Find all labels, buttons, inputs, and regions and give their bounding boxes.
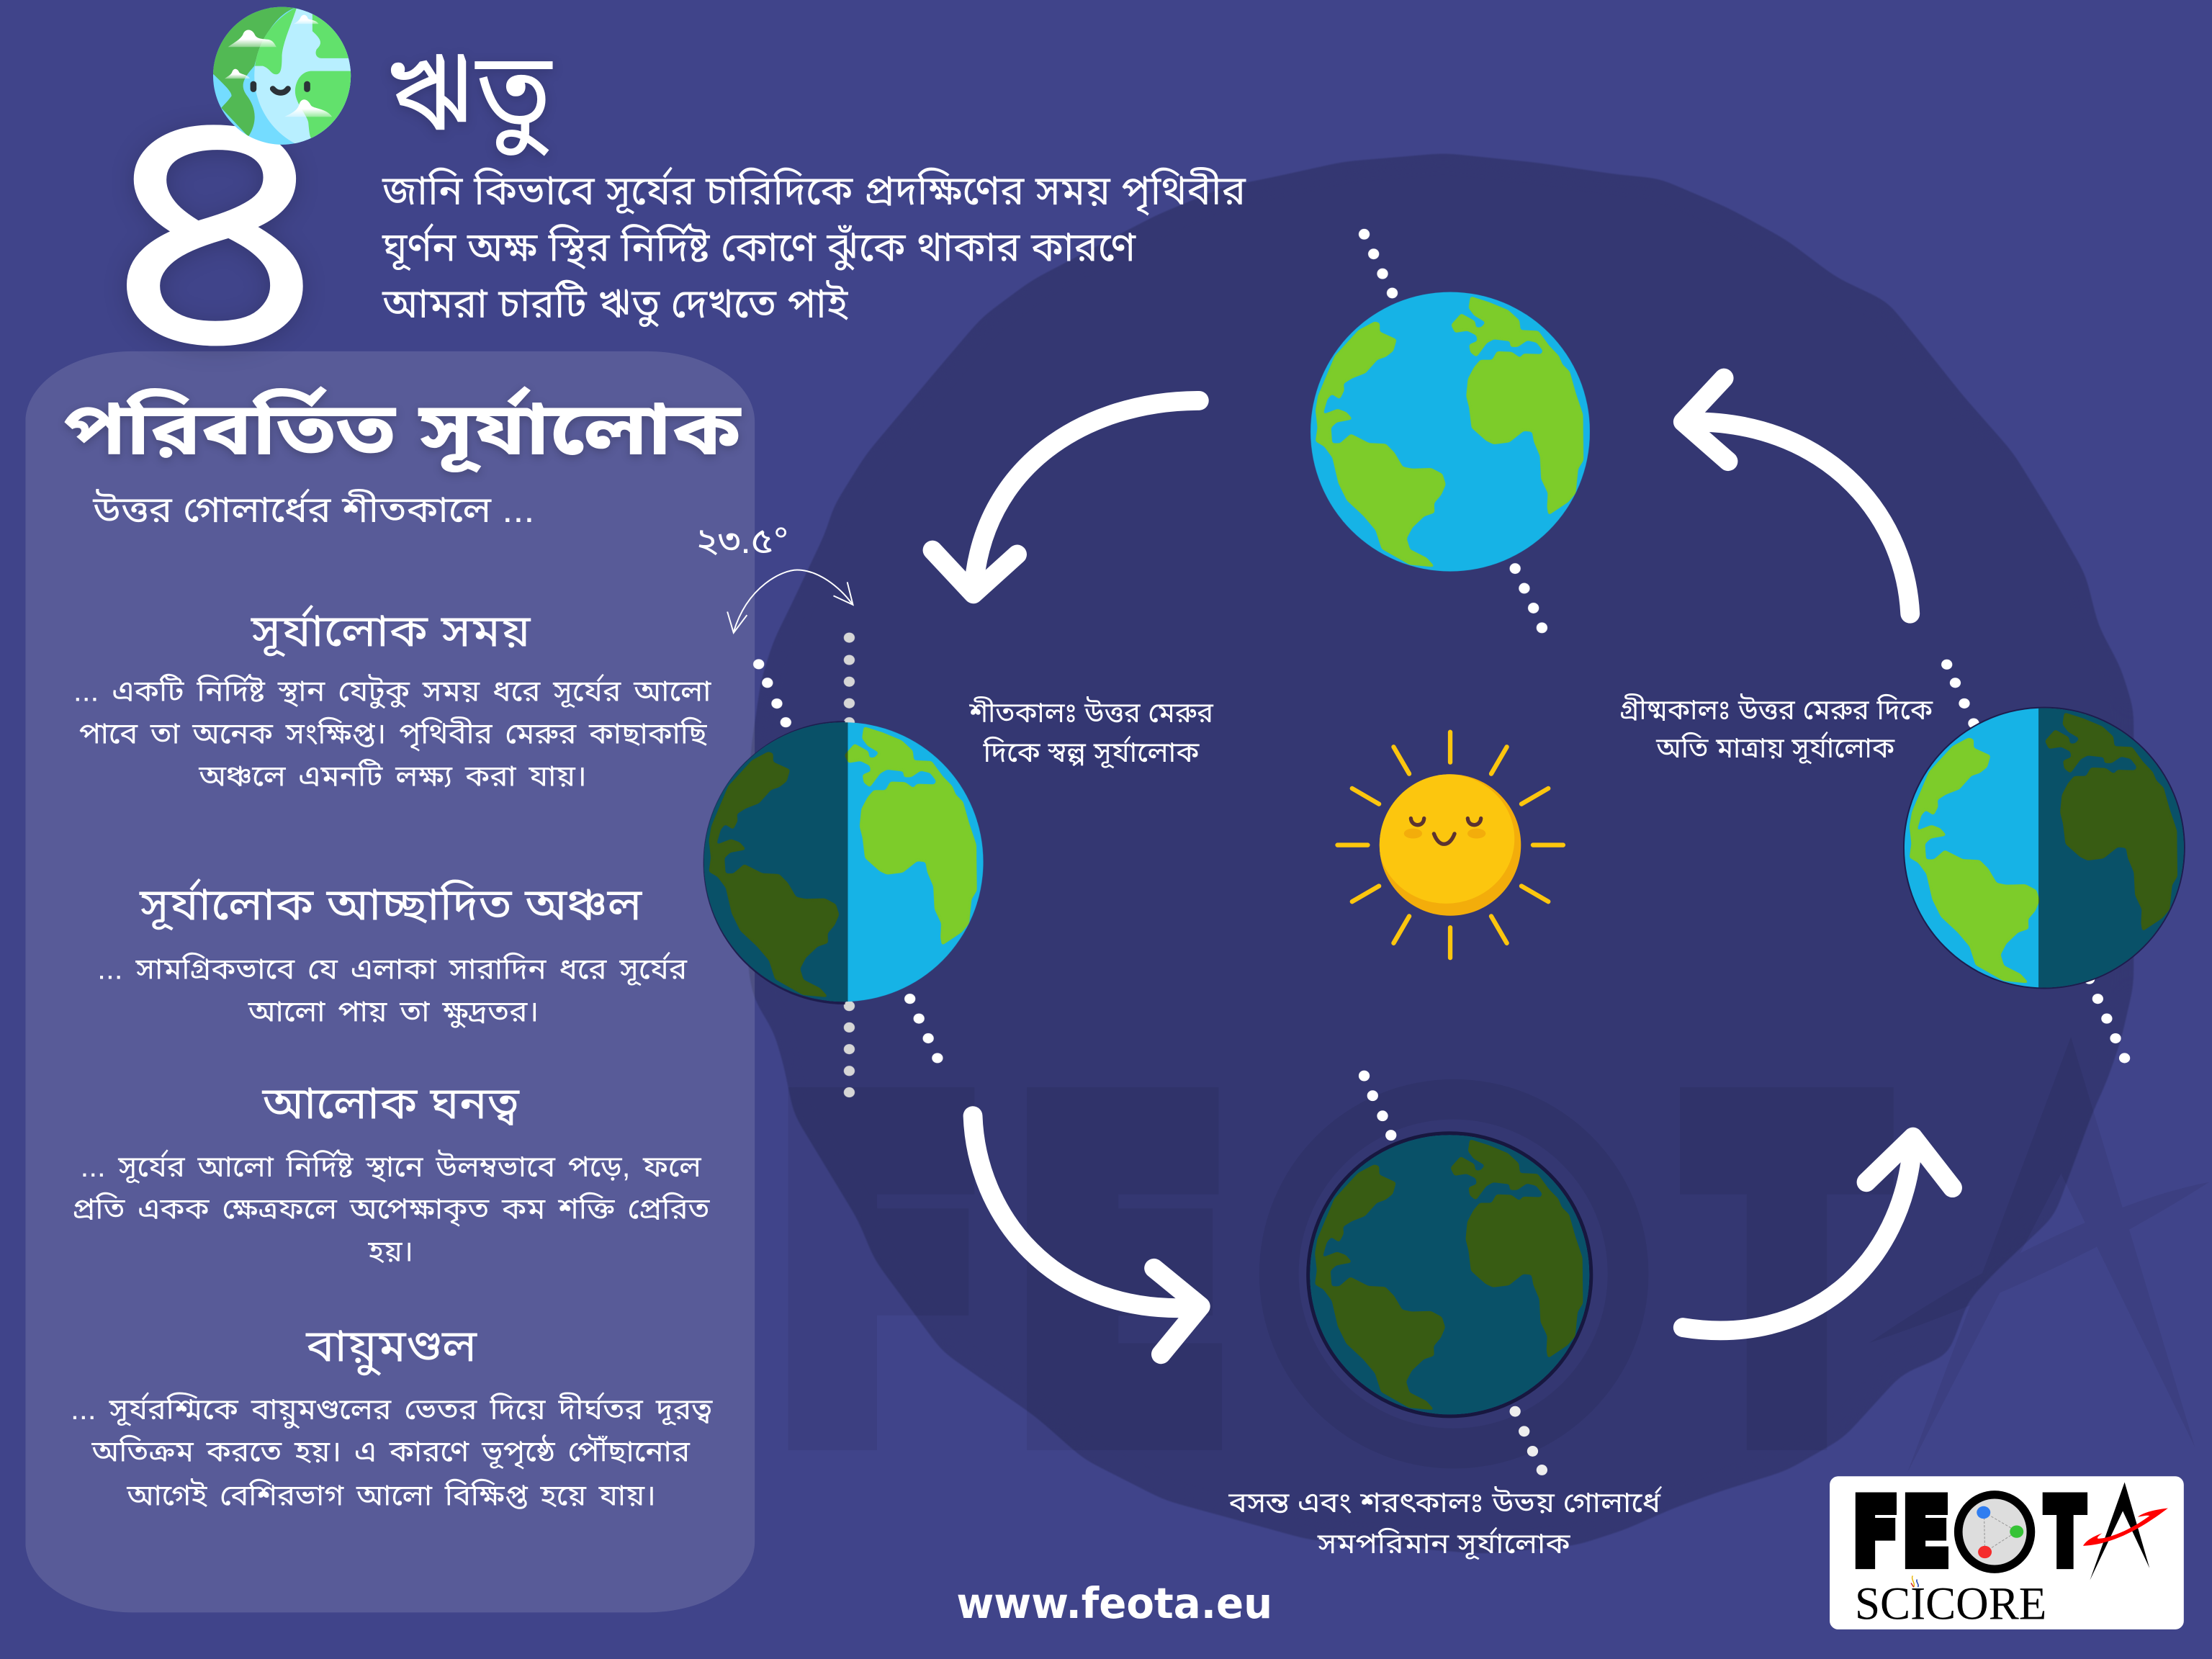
big number 4: ৪	[93, 25, 336, 419]
arrow: bottom to right	[1683, 1137, 1953, 1331]
icon: smiling sun	[1338, 732, 1563, 958]
label: winter	[968, 697, 1214, 768]
label: spring and autumn	[1228, 1486, 1663, 1560]
label: spring and autumn: বসন্ত এবং শরৎকালঃ উভয় গোলার্ধে	[1228, 1486, 1663, 1519]
label: summer	[1619, 694, 1933, 764]
website url: www.feota.eu	[956, 1578, 1272, 1628]
earth: winter position (left), half shaded	[691, 632, 984, 1097]
logo: FEOTA SciCore: T	[2045, 1480, 2085, 1587]
icon: smiling earth	[213, 7, 351, 145]
arrow: right to top	[1683, 378, 1910, 613]
section: light intensity: প্রতি একক ক্ষেত্রফলে অপেক্ষাকৃত কম শক্তি প্রেরিত	[72, 1192, 710, 1228]
title: seasons: ঋতু	[385, 31, 553, 157]
section: sunlit area: সূর্যালোক আচ্ছাদিত অঞ্চল	[139, 878, 643, 931]
section: sunlight duration: অঞ্চলে এমনটি লক্ষ্য করা যায়।	[198, 758, 587, 792]
section: light intensity: হয়।	[367, 1235, 413, 1268]
section: sunlit area	[97, 878, 688, 1028]
section: atmosphere: আগেই বেশিরভাগ আলো বিক্ষিপ্ত হয়ে যায়।	[126, 1478, 656, 1511]
watermark: FEOTA logo: T	[1693, 1024, 1882, 1531]
watermark: FEOTA logo: F	[776, 1024, 984, 1531]
logo: FEOTA SciCore: E	[1902, 1479, 1950, 1586]
label: summer: গ্রীষ্মকালঃ উত্তর মেরুর দিকে	[1619, 694, 1933, 726]
heading: changing sunlight: পরিবর্তিত সূর্যালোক	[63, 386, 742, 473]
section: sunlight duration: পাবে তা অনেক সংক্ষিপ্ত। পৃথিবীর মেরুর কাছাকাছি	[79, 716, 708, 752]
section: light intensity	[72, 1079, 710, 1268]
section: atmosphere: বায়ুমণ্ডল	[305, 1321, 477, 1377]
intro text	[382, 167, 1246, 328]
section: light intensity: আলোক ঘনত্ব	[261, 1079, 520, 1129]
watermark: FEOTA logo: E	[1015, 1023, 1228, 1531]
section: atmosphere: ... সূর্যরশ্মিকে বায়ুমণ্ডলের ভেতর দিয়ে দীর্ঘতর দূরত্ব	[71, 1391, 713, 1429]
label: spring and autumn: সমপরিমান সূর্যালোক	[1317, 1527, 1570, 1560]
section: atmosphere: অতিক্রম করতে হয়। এ কারণে ভূপৃষ্ঠে পৌঁছানোর	[91, 1434, 691, 1470]
dark blob backdrop	[747, 156, 2131, 1552]
section: sunlight duration: ... একটি নির্দিষ্ট স্থান যেটুকু সময় ধরে সূর্যের আলো	[73, 673, 712, 709]
earth: equinox position (bottom), shaded	[1306, 1071, 1593, 1475]
watermark: O ring around equinox earth	[1259, 1079, 1649, 1469]
intro text: ঘূর্ণন অক্ষ স্থির নির্দিষ্ট কোণে ঝুঁকে থাকার কারণে	[382, 223, 1136, 271]
logo: FEOTA SciCore: F	[1853, 1480, 1899, 1586]
subheading: উত্তর গোলার্ধের শীতকালে ...	[92, 487, 535, 530]
intro text: আমরা চারটি ঋতু দেখতে পাই	[382, 281, 848, 328]
label: summer: অতি মাত্রায় সূর্যালোক	[1655, 732, 1895, 764]
panel: changing sunlight	[25, 351, 755, 1612]
section: sunlight duration	[73, 604, 712, 792]
earth: summer position (right), half shaded	[1903, 660, 2194, 1063]
arrow: left to bottom	[973, 1116, 1200, 1354]
section: sunlit area: আলো পায় তা ক্ষুদ্রতর।	[248, 994, 539, 1028]
section: sunlight duration: সূর্যালোক সময়	[251, 604, 531, 657]
logo: FEOTA SciCore	[1830, 1476, 2184, 1629]
label: axial tilt angle: ২৩.৫°	[696, 520, 788, 561]
earth: northern summer position (top)	[1310, 229, 1590, 633]
arrow: tilt arc	[727, 570, 853, 633]
section: light intensity: ... সূর্যের আলো নির্দিষ্ট স্থানে উলম্বভাবে পড়ে, ফলে	[81, 1148, 702, 1184]
watermark: FEOTA logo	[776, 1023, 2209, 1531]
section: sunlit area: ... সামগ্রিকভাবে যে এলাকা সারাদিন ধরে সূর্যের	[97, 951, 688, 986]
section: atmosphere	[71, 1321, 713, 1511]
label: winter: দিকে স্বল্প সূর্যালোক	[983, 736, 1200, 768]
logo: FEOTA SciCore: SCICORE	[1855, 1577, 2046, 1629]
label: winter: শীতকালঃ উত্তর মেরুর	[968, 697, 1214, 729]
intro text: জানি কিভাবে সূর্যের চারিদিকে প্রদক্ষিণের সময় পৃথিবীর	[382, 167, 1246, 216]
arrow: top to left	[932, 400, 1199, 594]
